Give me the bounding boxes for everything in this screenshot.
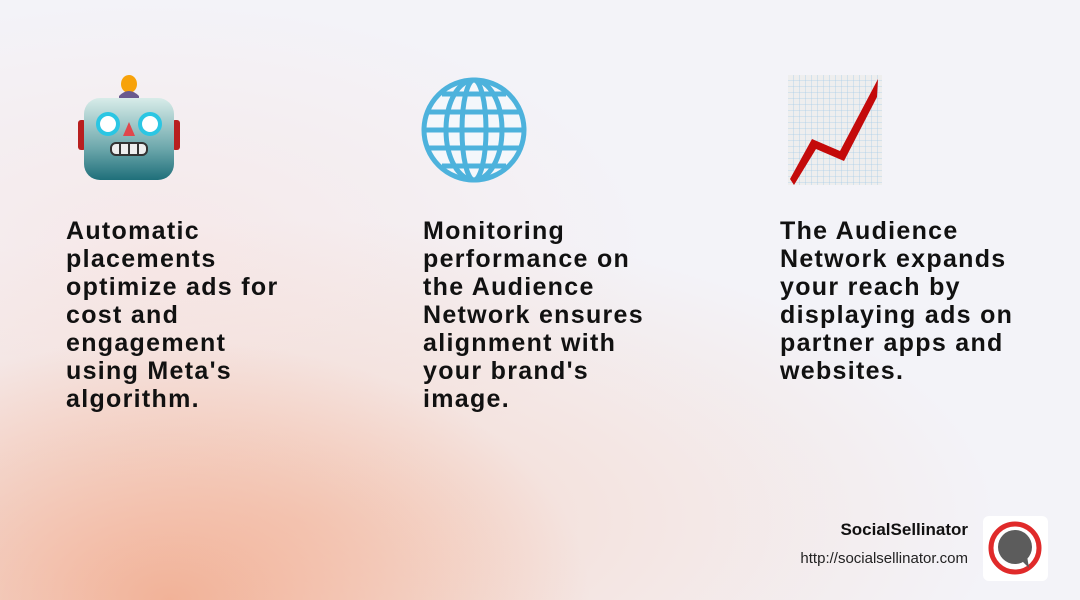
- text: automatic placements: optimize ads for: [66, 273, 278, 301]
- brand name: SocialSellinator: [840, 520, 968, 539]
- text: automatic placements: [66, 217, 278, 413]
- text: audience network reach: partner apps and: [780, 329, 1004, 357]
- text: automatic placements: cost and: [66, 301, 179, 329]
- text: audience network reach: websites.: [780, 357, 904, 385]
- text: automatic placements: using Meta's: [66, 357, 232, 385]
- icon: robot: [78, 75, 180, 180]
- text: automatic placements: Automatic: [66, 217, 200, 245]
- text: automatic placements: placements: [66, 245, 217, 273]
- text: monitoring performance: alignment with: [423, 329, 616, 357]
- text: monitoring performance: [423, 217, 644, 413]
- text: automatic placements: engagement: [66, 329, 226, 357]
- text: monitoring performance: Monitoring: [423, 217, 565, 245]
- text: monitoring performance: performance on: [423, 245, 630, 273]
- text: audience network reach: [780, 217, 1013, 385]
- text: monitoring performance: the Audience: [423, 273, 595, 301]
- text: audience network reach: Network expands: [780, 245, 1007, 273]
- icon: globe: [422, 78, 526, 182]
- text: audience network reach: displaying ads on: [780, 301, 1013, 329]
- text: monitoring performance: image.: [423, 385, 510, 413]
- brand url: http://socialsellinator.com: [800, 550, 968, 567]
- text: monitoring performance: your brand's: [423, 357, 589, 385]
- text: audience network reach: The Audience: [780, 217, 959, 245]
- text: monitoring performance: Network ensures: [423, 301, 644, 329]
- text: audience network reach: your reach by: [780, 273, 961, 301]
- logo: [983, 516, 1048, 581]
- text: automatic placements: algorithm.: [66, 385, 200, 413]
- icon: chart: [788, 75, 882, 185]
